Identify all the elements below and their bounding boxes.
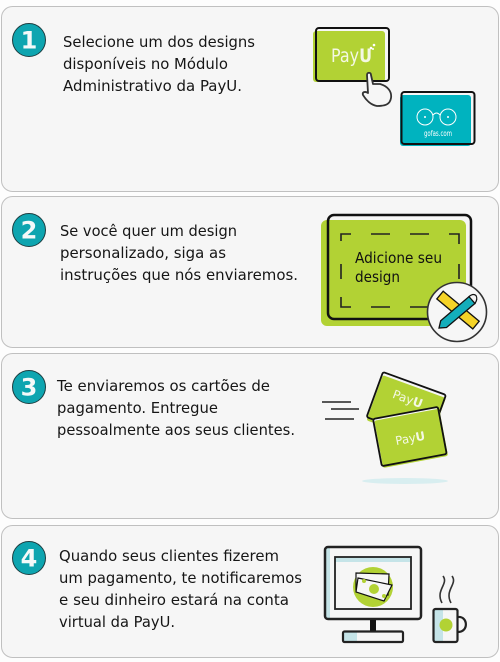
step 3 number badge: 3 [21, 374, 37, 402]
step 1 number badge [12, 24, 46, 56]
icon: front card: PayU [394, 429, 426, 448]
icon: speed lines [322, 402, 359, 419]
step 1 text: disponíveis no Módulo [63, 55, 228, 73]
step 4 number badge [12, 542, 46, 574]
step 3 text [56, 377, 295, 439]
icon: front card [372, 407, 448, 468]
step 4 text: Quando seus clientes fizerem [59, 547, 279, 565]
icon: gofas card [400, 92, 474, 146]
shadow under cards [362, 478, 448, 484]
step 4 text: um pagamento, te notificaremos [59, 569, 302, 587]
step 2 text [60, 222, 298, 284]
icon: design card [321, 215, 471, 326]
icon: PayU card with hand pointer [313, 28, 391, 106]
icon: PayU card with hand pointer: PayU [331, 45, 372, 67]
icon: back card: PayU [391, 387, 425, 411]
icon: computer monitor with money [325, 547, 421, 642]
panel: step 2 [2, 196, 498, 348]
step 3 number badge [12, 370, 46, 404]
icon: design card: design [355, 268, 400, 286]
step 4 text: e seu dinheiro estará na conta [59, 591, 289, 609]
step 3 text: pagamento. Entregue [57, 399, 218, 417]
panel: step 3 [2, 354, 498, 518]
step 4 number badge: 4 [21, 544, 37, 572]
step 3 text: Te enviaremos os cartões de [56, 377, 270, 395]
icon: ruler and pencil [428, 282, 486, 342]
icon: back card [366, 372, 447, 443]
step 2 text: Se você quer um design [60, 222, 237, 240]
step 2 number badge [12, 214, 46, 246]
step 1 text: Selecione um dos designs [63, 33, 255, 51]
step 2 text: instruções que nós enviaremos. [60, 266, 298, 284]
step 1 text [63, 33, 255, 95]
panel: step 4 [2, 526, 498, 658]
icon: gofas card: gofas.com [424, 129, 452, 138]
step 1 number badge: 1 [21, 26, 37, 54]
step 1 text: Administrativo da PayU. [63, 77, 242, 95]
step 4 text: virtual da PayU. [59, 613, 175, 631]
icon: coffee mug [434, 576, 466, 642]
step 3 text: pessoalmente aos seus clientes. [57, 421, 295, 439]
step 2 text: personalizado, siga as [60, 244, 226, 262]
icon: design card: Adicione seu [355, 249, 442, 267]
step 4 text [59, 547, 302, 631]
step 2 number badge: 2 [21, 216, 37, 244]
panel: step 1 [2, 6, 498, 192]
